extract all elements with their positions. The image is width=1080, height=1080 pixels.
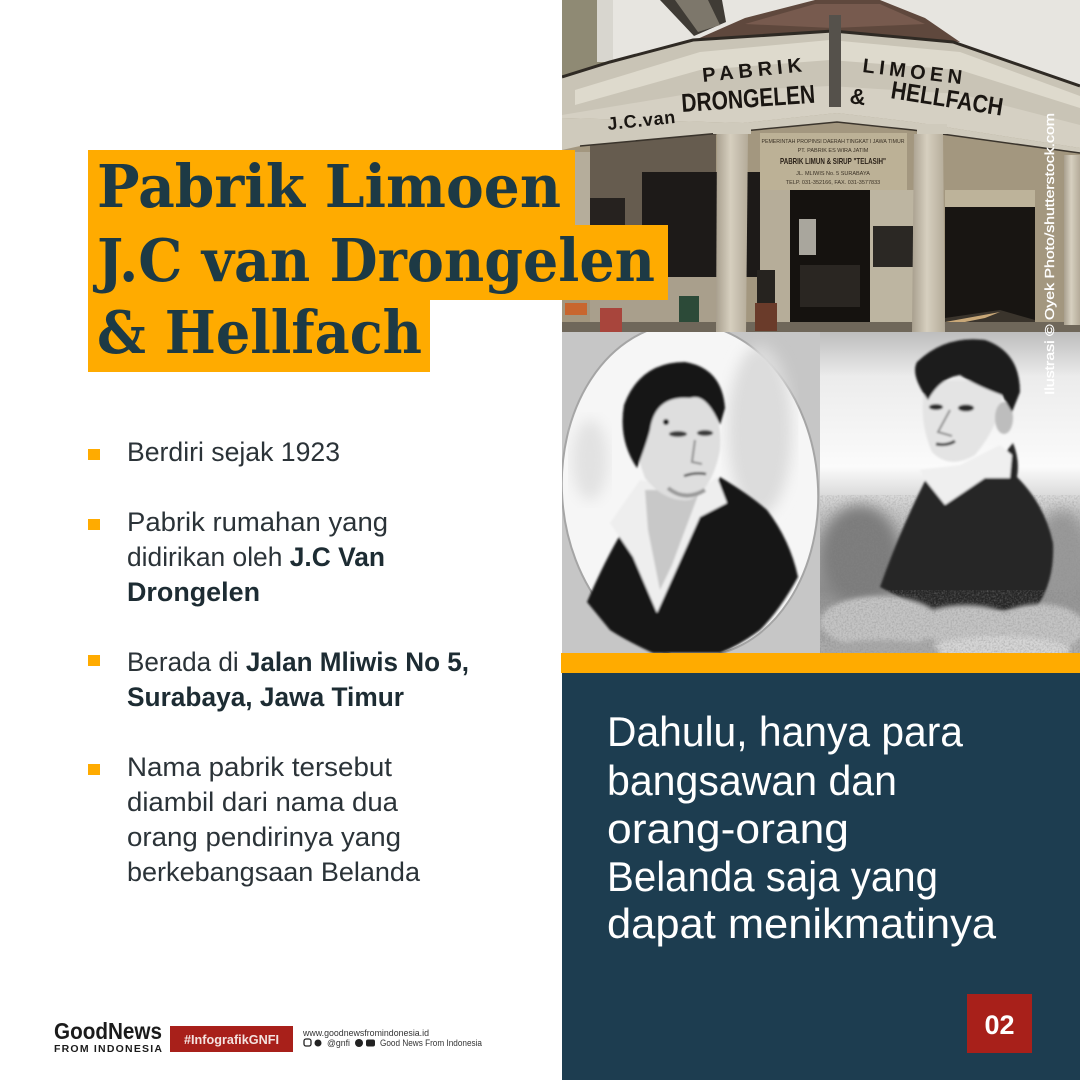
quote text: bangsawan dan [607,757,897,804]
photo: portrait right [820,332,1080,664]
bullet 4: berkebangsaan Belanda [127,857,421,887]
website and socials [302,1028,482,1048]
bullet 2 [88,507,388,607]
bullet list [88,437,469,887]
logo [54,1018,162,1055]
bullet 4: orang pendirinya yang [127,822,401,852]
sign board [760,133,907,190]
sign board: PT. PABRIK ES WIRA JATIM [798,148,869,154]
photo credit: Ilustrasi © Oyek Photo/shutterstock.com [1043,113,1057,395]
sign board: JL. MLIWIS No. 5 SURABAYA [796,171,870,177]
bullet 3: Berada di Jalan Mliwis No 5, [127,647,469,677]
bullet 3 [88,647,469,712]
title: Pabrik Limoen [97,152,561,221]
quote text: dapat menikmatinya [607,900,997,947]
hashtag badge [170,1026,293,1052]
facade lettering: DRONGELEN [680,79,816,118]
bullet 2: didirikan oleh J.C Van [127,542,385,572]
bullet 2: Drongelen [127,577,260,607]
columns [575,124,1080,332]
panel: navy quote [562,673,1080,1080]
logo: GoodNews [54,1018,162,1044]
title: J.C van Drongelen [92,226,655,295]
quote text [607,708,997,947]
bullet 2: Pabrik rumahan yang [127,507,388,537]
quote text: orang-orang [607,805,849,852]
photo: portrait left [562,332,820,653]
website and socials: www.goodnewsfromindonesia.id [302,1028,429,1039]
title: & Hellfach [97,298,422,367]
title [88,150,668,372]
quote text: Belanda saja yang [607,853,938,900]
bullet 4: diambil dari nama dua [127,787,399,817]
quote text: Dahulu, hanya para [607,708,964,755]
website and socials: @gnfi [327,1038,350,1048]
bullet 4: Nama pabrik tersebut [127,752,393,782]
page number: 02 [984,1010,1015,1040]
bullet 1: Berdiri sejak 1923 [127,437,340,467]
sign board: TELP. 031-352166, FAX. 031-3577833 [786,180,880,186]
facade lettering: HELLFACH [889,76,1005,122]
facade lettering: & [848,83,868,110]
photo: factory building [562,0,1080,332]
bullet 4 [88,752,421,887]
facade lettering: PABRIK [701,55,804,87]
facade lettering: J.C.van [606,107,676,134]
footer [54,1018,482,1055]
website and socials: Good News From Indonesia [380,1038,482,1048]
accent bar [561,653,1080,673]
hashtag badge: #InfografikGNFI [184,1032,279,1047]
logo: FROM INDONESIA [54,1043,162,1055]
page number [967,994,1032,1053]
sign board: PABRIK LIMUN & SIRUP "TELASIH" [780,156,886,166]
bullet 3: Surabaya, Jawa Timur [127,682,404,712]
sign board: PEMERINTAH PROPINSI DAERAH TINGKAT I JAWA TIMUR [762,139,905,145]
facade lettering [606,55,1005,134]
facade lettering: LIMOEN [861,55,963,89]
